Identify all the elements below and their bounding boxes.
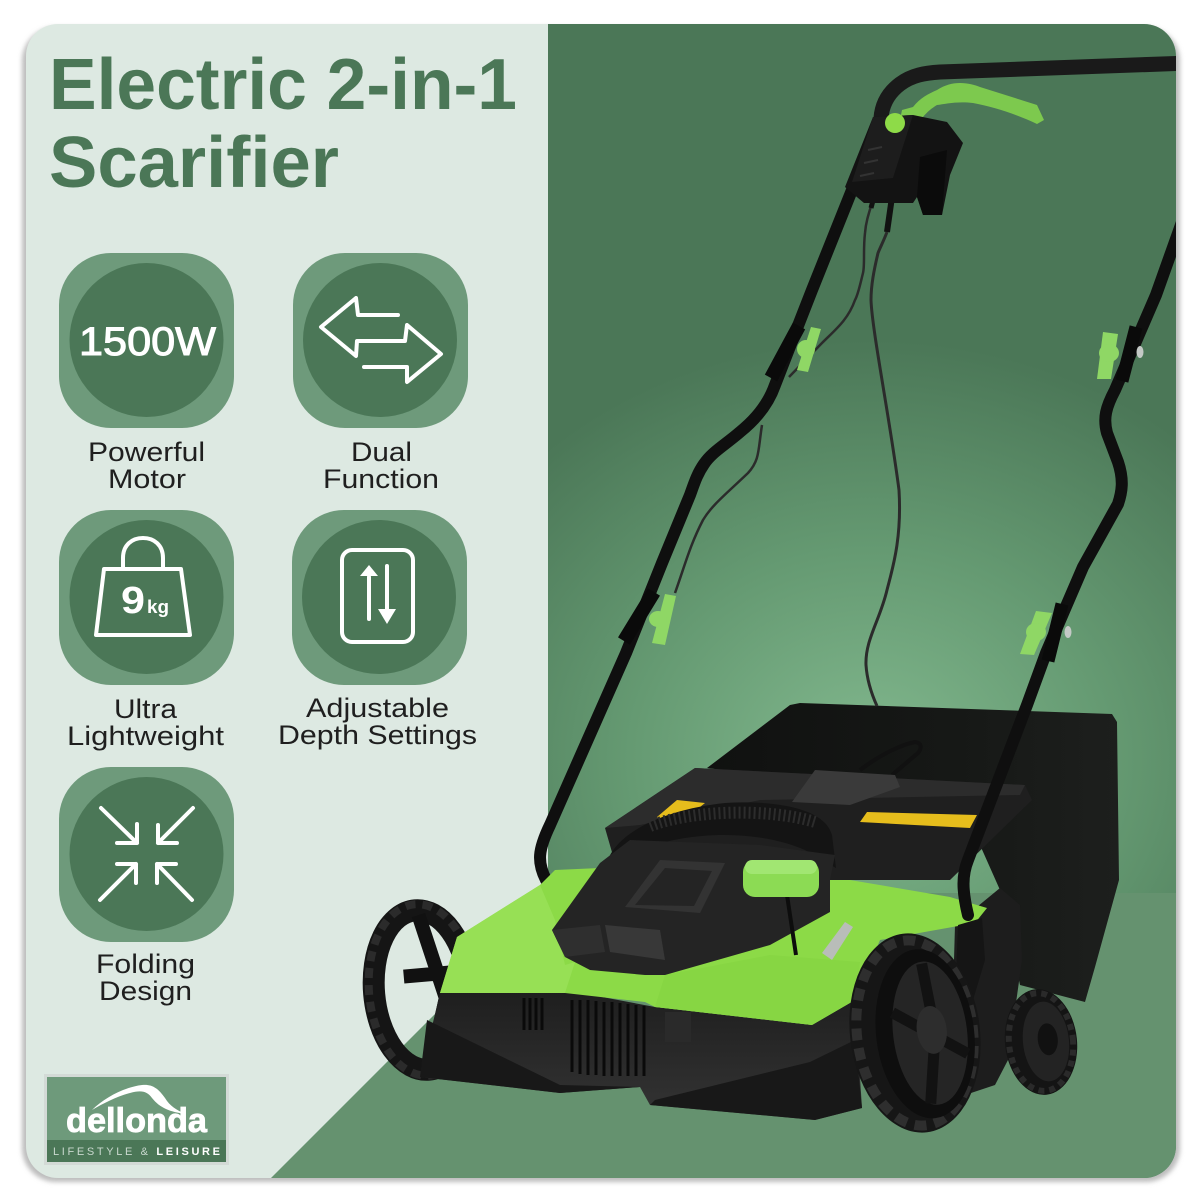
label: ultra lightweight: Lightweight (67, 721, 225, 751)
power cables (675, 190, 900, 706)
feature: dual function (293, 253, 468, 494)
grip lever (900, 83, 1044, 124)
label: powerful motor: Powerful (88, 437, 205, 467)
hopper cover (605, 768, 1025, 880)
green deck (440, 868, 987, 1025)
left wheel (362, 899, 465, 1081)
label: ultra lightweight: Ultra (114, 694, 178, 724)
icon: two opposing arrows (293, 253, 468, 428)
logo: dellonda (44, 1074, 229, 1165)
label: dual function: Function (323, 464, 439, 494)
logo: dellonda: LIFESTYLE & LEISURE (53, 1146, 220, 1158)
icon: 9kg weight: kg (147, 597, 169, 617)
label: dual function (323, 437, 439, 494)
rear body (954, 888, 1019, 1093)
logo: dellonda: dellonda (66, 1102, 208, 1140)
title: Scarifier (49, 123, 339, 203)
icon: 1500W badge: 1500W (79, 320, 216, 364)
title: Electric 2-in-1 (49, 45, 517, 125)
icon: up and down arrows (292, 510, 467, 685)
front wheel (850, 933, 978, 1133)
label: powerful motor: Motor (108, 464, 186, 494)
icon: inward arrows (59, 767, 234, 942)
depth lever (743, 860, 853, 960)
label: folding design (96, 949, 195, 1006)
lower body (420, 990, 862, 1120)
label: adjustable depth settings: Adjustable (306, 693, 449, 723)
right rear post (956, 919, 985, 962)
handle bolts (1064, 346, 1144, 638)
label: folding design: Folding (96, 949, 195, 979)
title (49, 45, 517, 203)
feature: adjustable depth (278, 510, 477, 750)
label: dual function: Dual (351, 437, 412, 467)
grass basket (707, 703, 1119, 1002)
feature: folding design (59, 767, 234, 1006)
label: folding design: Design (99, 976, 192, 1006)
rear wheel (1005, 989, 1078, 1095)
icon: 9kg weight: 9 (121, 580, 145, 622)
icon: 1500W badge (59, 253, 234, 428)
adjustment knobs (649, 327, 1119, 655)
icon: 9kg weight (59, 510, 234, 685)
product: scarifier mower (362, 63, 1190, 1140)
label: adjustable depth settings: Depth Settings (278, 720, 477, 750)
feature: ultra lightweight (59, 510, 234, 751)
left handle bar (540, 63, 1190, 880)
label: adjustable depth settings (278, 693, 477, 750)
label: powerful motor (88, 437, 205, 494)
control box (845, 113, 963, 215)
feature: powerful motor (59, 253, 234, 494)
motor cover (552, 802, 836, 975)
label: ultra lightweight (67, 694, 225, 751)
right handle bar (964, 222, 1182, 915)
